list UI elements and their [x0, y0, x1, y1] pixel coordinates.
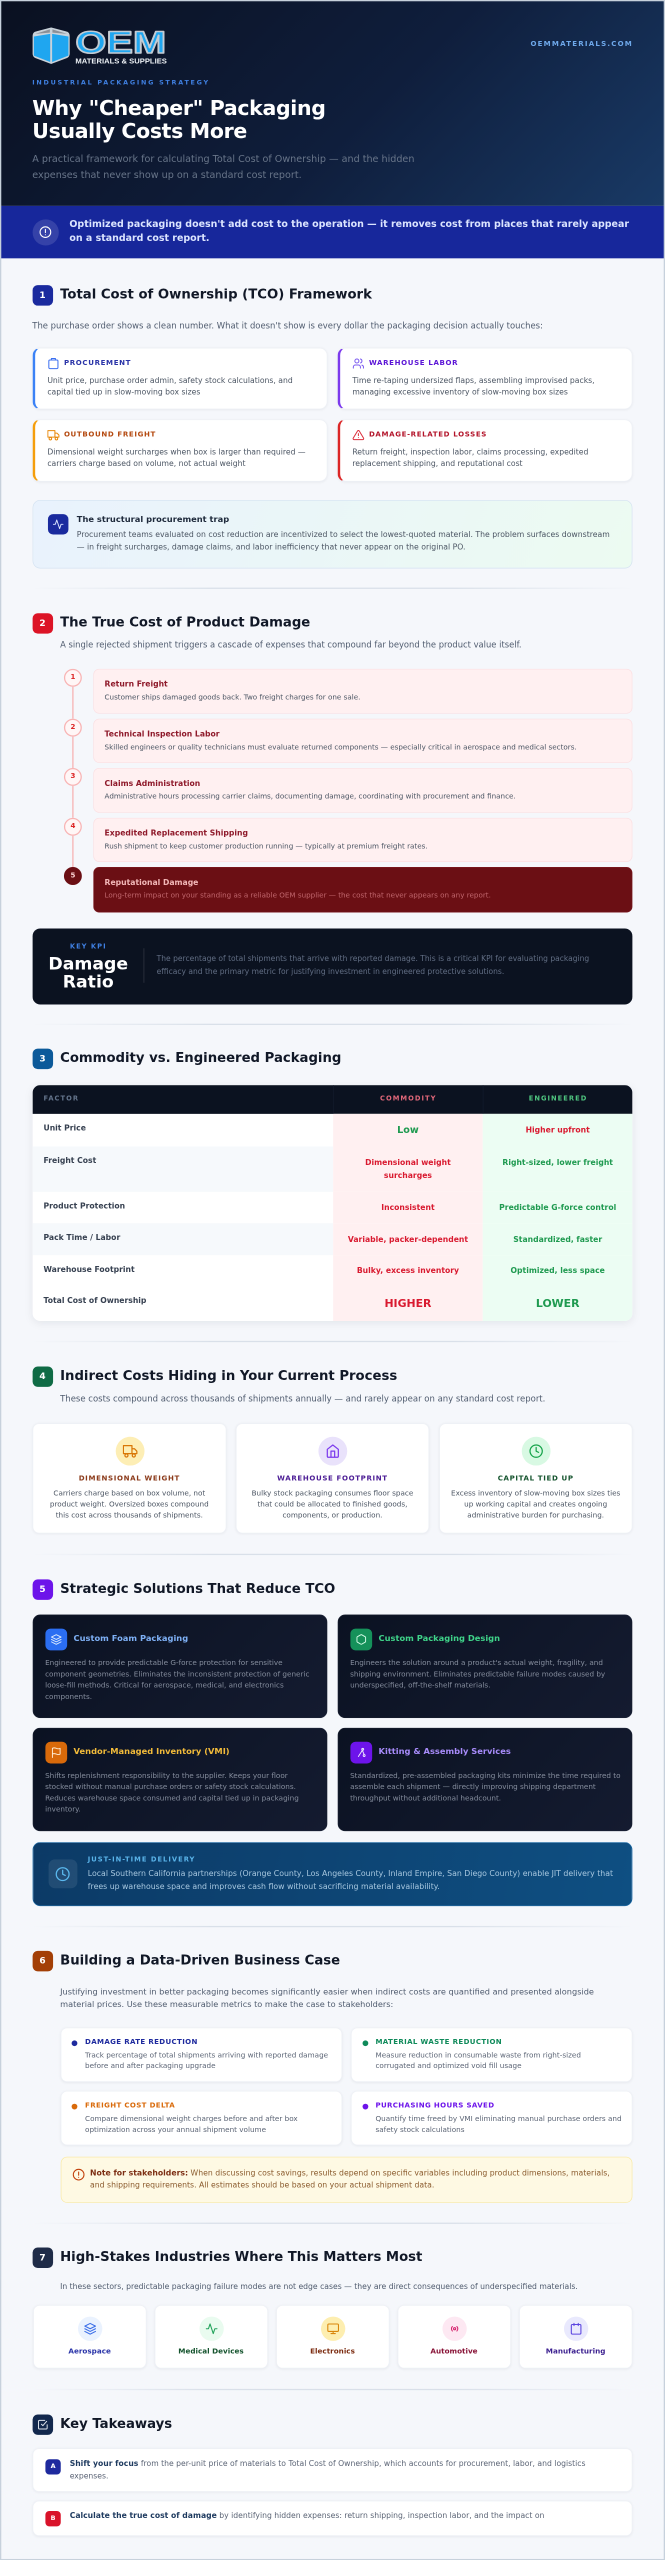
intro text: Justifying investment in better packaging becomes significantly easier when indirect costs are quantified and presented alongside: [60, 1987, 594, 1997]
intro text: A single rejected shipment triggers a cascade of expenses that compound far beyond the product value itself.: [60, 641, 522, 650]
card: dimensional weight: DIMENSIONAL WEIGHT: [79, 1474, 180, 1482]
panel text: [88, 1869, 613, 1891]
intro text: The purchase order shows a clean number. What it doesn't show is every dollar the packaging decision actually touches:: [32, 322, 543, 331]
section badge: [32, 1049, 53, 1069]
metric: material waste reduction: Measure reduction in consumable waste from right-sized: [375, 2051, 581, 2059]
table header: [33, 1085, 632, 1114]
callout text: Procurement teams evaluated on cost reduction are incentivized to select the lowest-quoted material. The problem surfaces downstream: [77, 530, 610, 539]
website: OEMMATERIALS.COM: [530, 40, 633, 48]
banner text: on a standard cost report.: [69, 232, 209, 243]
row: pack time: [33, 1224, 632, 1255]
industry: aerospace: [33, 2305, 146, 2368]
card: custom packaging design: underspecified, off-the-shelf materials.: [350, 1681, 490, 1689]
card: vendor-managed inventory: Shifts replenishment responsibility to the supplier. Keeps your floor: [45, 1772, 288, 1780]
section 3: commodity vs engineered: [32, 1048, 633, 1324]
row: warehouse footprint: Optimized, less space: [511, 1266, 605, 1275]
card: dimensional weight: product weight. Oversized boxes compound: [50, 1500, 209, 1508]
card: capital tied up: Excess inventory of slow-moving box sizes ties: [451, 1489, 620, 1497]
card: capital tied up: up working capital and creates ongoing: [464, 1500, 607, 1508]
card: damage-related losses: Return freight, inspection labor, claims processing, expedited: [352, 448, 588, 457]
title: Why "Cheaper" Packaging: [32, 96, 326, 120]
metric: material waste reduction: MATERIAL WASTE REDUCTION: [375, 2038, 502, 2046]
logo: OEM: [75, 26, 166, 60]
section badge: 2: [39, 618, 46, 629]
row: warehouse footprint: Bulky, excess inventory: [357, 1266, 459, 1275]
metric: freight cost delta: Compare dimensional weight charges before and after box: [85, 2115, 298, 2123]
step 1: Return Freight: [105, 680, 168, 689]
card: dimensional weight: Carriers charge based on box volume, not: [53, 1489, 205, 1497]
card: damage-related losses: DAMAGE-RELATED LOSSES: [369, 430, 487, 439]
card: kitting and assembly: assemble each shipment — directly improving shipping department: [350, 1783, 596, 1791]
step 4: 4: [70, 821, 75, 830]
card: warehouse footprint: that could be allocated to finished goods,: [257, 1500, 407, 1508]
metric: damage rate reduction: [61, 2027, 342, 2082]
step 4: [64, 818, 632, 867]
takeaway A: Shift your focus from the per-unit price of materials to Total Cost of Ownership, which accounts for procurement, labor, and logistics: [70, 2459, 585, 2468]
row: total cost of ownership: Total Cost of Ownership: [43, 1296, 146, 1305]
subtitle: [32, 153, 414, 180]
metric: damage rate reduction: before and after packaging upgrade: [85, 2062, 216, 2070]
metric: freight cost delta: FREIGHT COST DELTA: [85, 2101, 175, 2110]
logo: [32, 26, 167, 65]
card: warehouse footprint: [236, 1423, 429, 1533]
industry: aerospace: Aerospace: [68, 2347, 111, 2356]
section badge: 3: [39, 1054, 46, 1064]
card: kitting and assembly: throughput without additional headcount.: [350, 1794, 501, 1802]
icon: alert: [72, 2168, 84, 2180]
row: pack time: Pack Time / Labor: [43, 1233, 120, 1242]
section heading: Indirect Costs Hiding in Your Current Process: [60, 1368, 397, 1383]
metric: purchasing hours saved: [351, 2091, 632, 2145]
metric: purchasing hours saved: PURCHASING HOURS SAVED: [375, 2101, 494, 2110]
logo: MATERIALS & SUPPLIES: [75, 56, 167, 65]
row: total cost of ownership: LOWER: [536, 1297, 579, 1310]
metric: damage rate reduction: DAMAGE RATE REDUCTION: [85, 2038, 198, 2046]
card: warehouse labor: WAREHOUSE LABOR: [369, 359, 458, 367]
card: kitting and assembly: Kitting & Assembly Services: [379, 1747, 511, 1756]
note text: Note for stakeholders: When discussing cost savings, results depend on specific variables including product dimensions, materials,: [90, 2168, 610, 2177]
icon badge: checklist: [32, 2414, 53, 2435]
row: warehouse footprint: [43, 1256, 632, 1286]
takeaway B: Calculate the true cost of damage by identifying hidden expenses: return shipping, inspection labor, and the impact on: [70, 2511, 544, 2520]
icon: activity: [48, 514, 68, 534]
industry: electronics: [276, 2305, 389, 2368]
card: custom foam packaging: components.: [45, 1692, 92, 1701]
card: warehouse footprint: components, or production.: [282, 1511, 382, 1519]
panel label: JUST-IN-TIME DELIVERY: [88, 1856, 195, 1863]
section heading: Building a Data-Driven Business Case: [60, 1952, 340, 1967]
card: custom foam packaging: [32, 1615, 327, 1718]
step 4: Expedited Replacement Shipping: [105, 828, 248, 837]
step 1: 1: [70, 673, 75, 681]
card: custom packaging design: shipping environment. Eliminates predictable failure modes caused by: [350, 1670, 605, 1678]
section 5: strategic solutions: [32, 1579, 632, 1906]
step 3: 3: [70, 772, 75, 780]
industry: automotive: [397, 2305, 511, 2368]
step 2: Skilled engineers or quality technicians must evaluate returned components — especially critical in aerospace and medical sectors.: [105, 743, 577, 751]
card: outbound freight: [32, 419, 327, 481]
section heading: Key Takeaways: [60, 2416, 172, 2431]
card: outbound freight: OUTBOUND FREIGHT: [64, 430, 156, 439]
row: product protection: Inconsistent: [381, 1203, 435, 1212]
step 5: [64, 867, 632, 912]
metric: material waste reduction: [351, 2027, 632, 2082]
card: procurement: Unit price, purchase order admin, safety stock calculations, and: [47, 376, 293, 385]
industry: electronics: Electronics: [310, 2347, 355, 2356]
card: warehouse footprint: Bulky stock packaging consumes floor space: [252, 1489, 413, 1497]
step 2: Technical Inspection Labor: [105, 729, 220, 738]
card: custom foam packaging: Custom Foam Packaging: [74, 1634, 188, 1643]
row: product protection: Predictable G-force control: [499, 1203, 616, 1212]
industry: automotive: Automotive: [430, 2347, 478, 2356]
card: capital tied up: CAPITAL TIED UP: [498, 1474, 574, 1482]
row: freight cost: Right-sized, lower freight: [502, 1158, 613, 1167]
step 3: [64, 768, 632, 818]
panel text: frees up warehouse space and improves cash flow without sacrificing material availability.: [88, 1882, 440, 1891]
card: outbound freight: carriers charge based on volume, not actual weight: [47, 459, 246, 468]
takeaway A: expenses.: [70, 2471, 108, 2480]
section 7: high-stakes industries: [32, 2248, 632, 2369]
header: [0, 0, 665, 206]
title: [32, 96, 326, 143]
card: custom foam packaging: component geometries. Eliminates the inconsistent protection of generic: [45, 1670, 309, 1678]
card: warehouse labor: managing excessive inventory of slow-moving box sizes: [352, 388, 568, 397]
row: unit price: Low: [397, 1124, 419, 1135]
row: unit price: Higher upfront: [526, 1125, 590, 1134]
card: vendor-managed inventory: stocked without manual purchase orders or safety stock calculations.: [45, 1783, 296, 1791]
panel text: Local Southern California partnerships (Orange County, Los Angeles County, Inland Empire, San Diego County) enable JIT delivery that: [88, 1869, 613, 1878]
intro text: These costs compound across thousands of shipments annually — and rarely appear on any standard cost report.: [60, 1395, 545, 1404]
industry: manufacturing: [519, 2305, 632, 2368]
row: product protection: [43, 1192, 632, 1223]
step 1: [64, 668, 632, 719]
card: vendor-managed inventory: Reduces warehouse space consumed and capital tied up in packaging: [45, 1794, 299, 1802]
note for stakeholders: [61, 2157, 632, 2203]
row: unit price: Unit Price: [43, 1123, 86, 1132]
card: custom packaging design: Engineers the solution around a product's actual weight, fragility, and: [350, 1659, 603, 1667]
card: damage-related losses: [337, 419, 632, 481]
card: warehouse labor: [337, 348, 632, 409]
card: kitting and assembly: [337, 1727, 632, 1831]
card: vendor-managed inventory: [32, 1727, 327, 1831]
section 6: business case: [32, 1950, 632, 2203]
callout text: — in freight surcharges, damage claims, and labor inefficiency that never appear on the original PO.: [77, 542, 465, 551]
KPI value: Damage: [48, 954, 128, 974]
KPI description: [156, 954, 589, 976]
eyebrow: INDUSTRIAL PACKAGING STRATEGY: [32, 79, 210, 86]
row: pack time: Variable, packer-dependent: [348, 1235, 468, 1244]
step 3: Claims Administration: [105, 779, 200, 788]
cascade steps: [64, 668, 632, 912]
table header: ENGINEERED: [529, 1095, 587, 1102]
section badge: 4: [39, 1372, 46, 1382]
banner text: [69, 218, 629, 243]
section badge: [32, 1366, 53, 1387]
comparison table: [33, 1085, 632, 1321]
metric: material waste reduction: corrugated and optimized void fill usage: [375, 2062, 522, 2070]
table header: FACTOR: [43, 1095, 79, 1102]
note text: and shipping requirements. All estimates should be based on your actual shipment data.: [90, 2180, 434, 2189]
KPI value: Ratio: [63, 972, 114, 992]
intro text: material prices. Use these measurable metrics to make the case to stakeholders:: [60, 2000, 393, 2010]
step 5: Long-term impact on your standing as a reliable OEM supplier — the cost that never appears on any report.: [105, 892, 491, 900]
row: freight cost: Dimensional weight: [365, 1158, 451, 1167]
takeaway A: [33, 2448, 632, 2492]
row: freight cost: Freight Cost: [43, 1156, 96, 1165]
section badge: [32, 1579, 53, 1600]
metric: purchasing hours saved: Quantify time freed by VMI eliminating manual purchase orders and: [375, 2115, 622, 2123]
card: dimensional weight: this cost across thousands of shipments.: [56, 1511, 203, 1519]
takeaway B: B: [51, 2515, 56, 2522]
industry: medical devices: [154, 2305, 268, 2368]
row: unit price: [43, 1114, 632, 1146]
section heading: Commodity vs. Engineered Packaging: [60, 1050, 341, 1065]
KPI label: KEY KPI: [70, 943, 107, 950]
step 5: Reputational Damage: [105, 878, 198, 887]
card: vendor-managed inventory: inventory.: [45, 1805, 81, 1814]
card: outbound freight: Dimensional weight surcharges when box is larger than required —: [47, 448, 306, 457]
card: kitting and assembly: Standardized, pre-assembled packaging kits minimize the time required to: [350, 1772, 621, 1780]
icon: info: [32, 219, 59, 245]
row: freight cost: [33, 1146, 632, 1192]
section 4: indirect costs: [32, 1366, 632, 1534]
section heading: High-Stakes Industries Where This Matters Most: [60, 2249, 422, 2264]
section badge: [32, 2248, 53, 2268]
section badge: 6: [39, 1956, 46, 1966]
KPI panel: damage ratio: [32, 928, 632, 1005]
card: procurement: [32, 348, 327, 409]
section badge: 5: [39, 1584, 46, 1594]
metric: purchasing hours saved: safety stock calculations: [375, 2125, 464, 2134]
callout: procurement trap: [32, 500, 632, 568]
row: pack time: Standardized, faster: [513, 1235, 602, 1244]
callout title: The structural procurement trap: [77, 514, 229, 524]
step 4: Rush shipment to keep customer production running — typically at premium freight rates.: [105, 842, 428, 850]
section badge: [32, 1951, 53, 1971]
metric: damage rate reduction: Track percentage of total shipments arriving with reported damage: [85, 2051, 328, 2059]
step 5: 5: [70, 871, 75, 879]
section heading: Total Cost of Ownership (TCO) Framework: [60, 286, 372, 302]
section badge: [32, 613, 53, 634]
section: key takeaways: [32, 2414, 632, 2536]
row: warehouse footprint: Warehouse Footprint: [43, 1265, 135, 1274]
industry: manufacturing: Manufacturing: [546, 2347, 605, 2356]
card: capital tied up: administrative burden for purchasing.: [467, 1511, 604, 1519]
section badge: 1: [39, 290, 46, 301]
section 2: cost of product damage: [32, 613, 632, 1004]
card: warehouse footprint: WAREHOUSE FOOTPRINT: [277, 1474, 388, 1482]
step 2: 2: [70, 722, 75, 731]
row: product protection: Product Protection: [43, 1202, 125, 1211]
card: procurement: capital tied up in slow-moving box sizes: [47, 388, 200, 397]
callout text: [77, 530, 610, 551]
step 2: [64, 718, 632, 768]
step 1: Customer ships damaged goods back. Two freight charges for one sale.: [105, 693, 360, 702]
section 1: TCO framework: [32, 285, 632, 568]
takeaway A: A: [51, 2463, 56, 2470]
icon: clock: [48, 1859, 77, 1888]
step 3: Administrative hours processing carrier claims, documenting damage, coordinating with procurement and finance.: [105, 792, 516, 801]
section heading: Strategic Solutions That Reduce TCO: [60, 1580, 335, 1596]
key message banner: [0, 206, 665, 258]
card: vendor-managed inventory: Vendor-Managed Inventory (VMI): [74, 1747, 230, 1756]
section heading: The True Cost of Product Damage: [60, 614, 310, 630]
KPI value: [48, 954, 128, 992]
card: custom packaging design: [337, 1615, 632, 1718]
row: freight cost: surcharges: [384, 1171, 432, 1180]
industry: medical devices: Medical Devices: [178, 2347, 244, 2356]
KPI description: The percentage of total shipments that arrive with reported damage. This is a critical KPI for evaluating packaging: [157, 954, 589, 963]
row: total cost of ownership: [43, 1286, 632, 1321]
section badge: 7: [39, 2253, 46, 2263]
metric: freight cost delta: optimization across your annual shipment volume: [85, 2125, 266, 2134]
card: damage-related losses: replacement shipping, and reputational cost: [352, 459, 523, 468]
takeaway B: [33, 2501, 632, 2536]
card: warehouse labor: Time re-taping undersized flaps, assembling improvised packs,: [352, 376, 595, 385]
subtitle: expenses that never show up on a standard cost report.: [32, 169, 302, 180]
card: procurement: PROCUREMENT: [64, 359, 131, 367]
note text: [90, 2168, 610, 2189]
card: dimensional weight: [33, 1423, 226, 1533]
title: Usually Costs More: [32, 119, 247, 143]
table header: COMMODITY: [380, 1095, 436, 1102]
subtitle: A practical framework for calculating Total Cost of Ownership — and the hidden: [32, 153, 414, 165]
section badge: [32, 285, 53, 306]
KPI description: efficacy and the primary metric for justifying investment in engineered protective solutions.: [157, 967, 504, 976]
banner text: Optimized packaging doesn't add cost to the operation — it removes cost from places that rarely appear: [69, 218, 629, 229]
intro text: In these sectors, predictable packaging failure modes are not edge cases — they are direct consequences of underspecified materials.: [60, 2282, 578, 2291]
intro text: [60, 1987, 594, 2010]
card: custom foam packaging: Engineered to provide predictable G-force protection for sensitive: [45, 1659, 283, 1667]
card: capital tied up: [439, 1423, 632, 1533]
metric: freight cost delta: [61, 2091, 342, 2145]
card: custom packaging design: Custom Packaging Design: [379, 1634, 500, 1643]
row: total cost of ownership: HIGHER: [384, 1297, 431, 1310]
card: custom foam packaging: loose-fill methods. Critical for aerospace, medical, and electronics: [45, 1681, 284, 1689]
panel: just-in-time delivery: [32, 1842, 632, 1906]
